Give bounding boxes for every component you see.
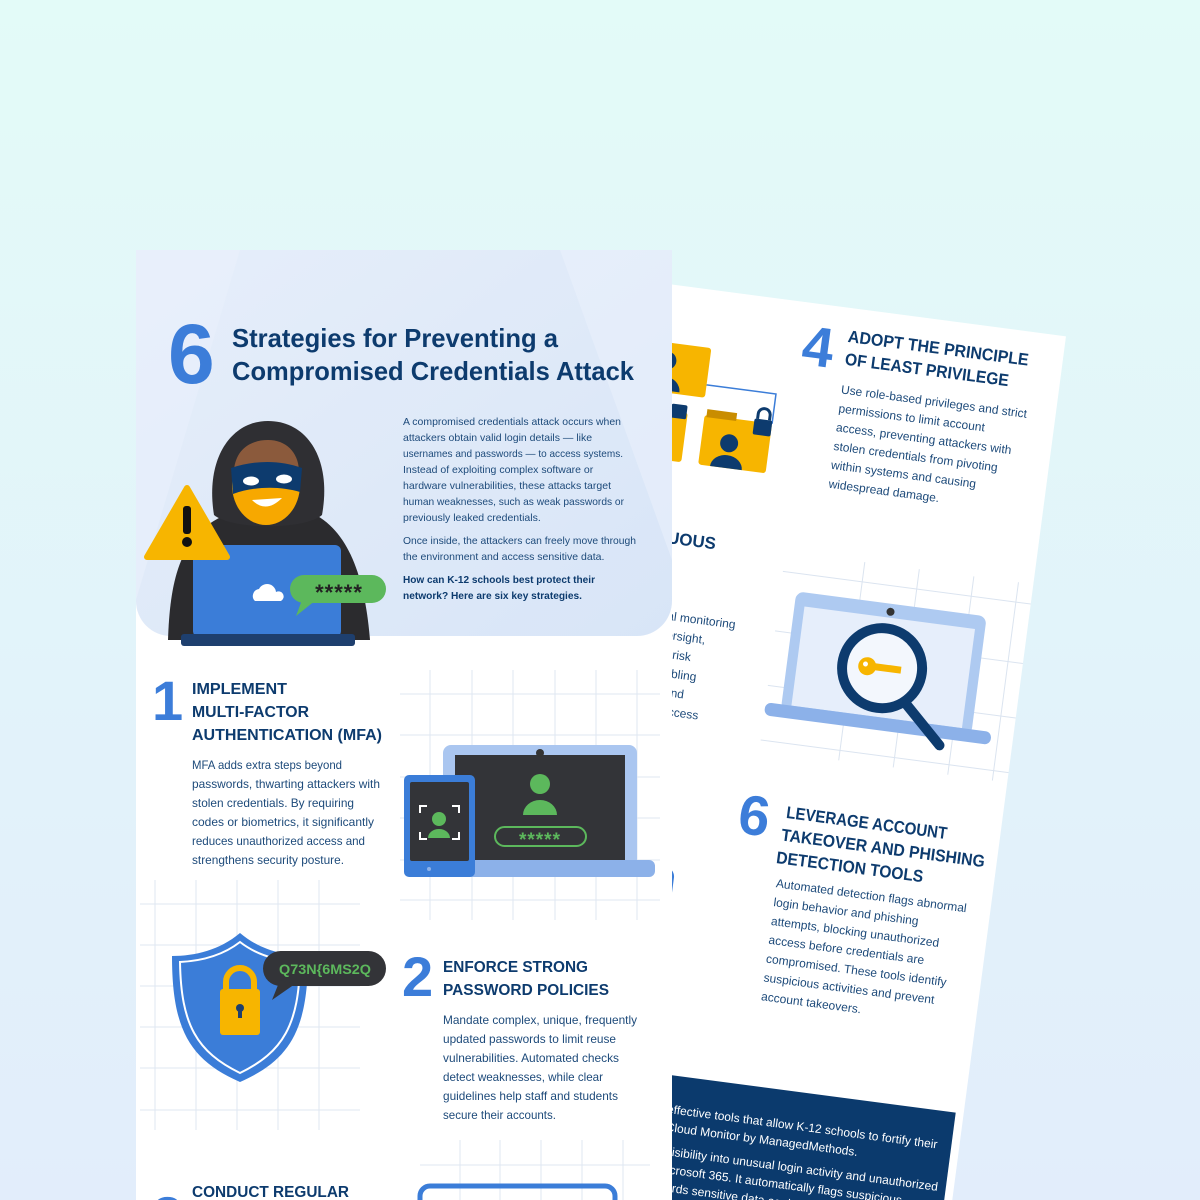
- illustration: shield with padlock and password bubble: [172, 933, 386, 1082]
- intro text: hardware vulnerabilities, these attacks target: [403, 480, 611, 492]
- section 1 body: codes or biometrics, it significantly: [192, 815, 374, 829]
- intro text: Instead of exploiting complex software or: [403, 464, 594, 476]
- illustration: hacker at laptop: [147, 421, 386, 646]
- section 6 body: suspicious activities and prevent: [763, 970, 936, 1007]
- section 6 heading: [740, 796, 984, 882]
- left page: [136, 250, 672, 1200]
- section 4 body: stolen credentials from pivoting: [833, 439, 999, 474]
- section 6 body: login behavior and phishing: [773, 895, 919, 928]
- illustration: blue device (partly hidden): [672, 870, 674, 892]
- intro text: the environment and access sensitive data.: [403, 551, 604, 563]
- section 5 body (partly hidden): faster response, and: [575, 673, 685, 701]
- section 1 heading: 1: [152, 669, 183, 732]
- section 2 body: Mandate complex, unique, frequently: [443, 1013, 637, 1027]
- title: Compromised Credentials Attack: [232, 356, 635, 386]
- section 6 heading: TAKEOVER AND PHISHING: [780, 826, 986, 871]
- header panel: [136, 250, 672, 636]
- intro text: [403, 416, 636, 602]
- section 4 body: widespread damage.: [827, 477, 940, 505]
- section 5 body (partly hidden): provides real-time oversight,: [555, 613, 706, 647]
- section 6 body: account takeovers.: [760, 989, 862, 1016]
- illustration: shield with padlock and password bubble: Q73N{6MS2Q: [279, 961, 371, 977]
- illustration: folders with locks: [672, 343, 777, 473]
- intro text: A compromised credentials attack occurs when: [403, 416, 621, 428]
- section 2 body: [443, 1013, 637, 1122]
- section 2 body: updated passwords to limit reuse: [443, 1032, 616, 1046]
- grid decorations: [140, 670, 660, 1200]
- title: 6: [168, 307, 215, 401]
- section 2 heading: ENFORCE STRONG: [443, 959, 588, 976]
- section 4 heading: [802, 328, 1028, 386]
- illustration: laptop with magnifier and key: [763, 589, 1007, 752]
- section 6 body: [762, 879, 966, 1014]
- section 5 body (partly hidden): to data sooner.: [589, 714, 670, 738]
- section 1 body: strengthens security posture.: [192, 853, 344, 867]
- section 4 body: permissions to limit account: [838, 401, 986, 435]
- section 2 heading: 2: [402, 945, 433, 1008]
- section 1 body: reduces unauthorized access and: [192, 834, 365, 848]
- section 5 body (partly hidden): limiting unauthorized access: [548, 689, 699, 723]
- conclusion band: There are cost-effective tools that allow K-12 schools to fortify their: [586, 1091, 938, 1151]
- conclusion band: [672, 1075, 956, 1200]
- section 5 body (partly hidden): Continuous account and behavioral monitoring: [489, 585, 736, 632]
- section 1 body: [192, 758, 380, 867]
- section 2 heading: PASSWORD POLICIES: [443, 982, 609, 999]
- section 6 body: compromised. These tools identify: [765, 952, 947, 989]
- section 5 body (partly hidden): [672, 612, 735, 720]
- section 5 heading (partly hidden): CONTINUOUS: [601, 520, 717, 553]
- section 1 heading: MULTI-FACTOR: [192, 704, 309, 721]
- section 5 body (partly hidden): identifying at-risk: [601, 638, 693, 664]
- illustration: MFA laptop and tablet: *****: [519, 830, 561, 851]
- section 2 body: secure their accounts.: [443, 1108, 556, 1122]
- section 6 heading: DETECTION TOOLS: [775, 848, 924, 886]
- illustration: hacker at laptop: *****: [315, 580, 363, 605]
- conclusion band: defenses, such as Cloud Monitor by ManagedMethods.: [566, 1107, 859, 1159]
- intro text: How can K-12 schools best protect their: [403, 574, 595, 586]
- section 5 body (partly hidden): accounts, enabling: [596, 657, 697, 684]
- section 6 heading: 6: [735, 782, 774, 849]
- section 4 body: [829, 385, 1028, 503]
- title: Strategies for Preventing a: [232, 323, 559, 353]
- section 6 body: Automated detection flags abnormal: [775, 876, 968, 915]
- illustration: section 3 device outline (cut off): [420, 1186, 615, 1200]
- intro text: human weaknesses, such as weak passwords or: [403, 496, 624, 508]
- section 2 heading: [404, 957, 608, 996]
- section 4 heading: OF LEAST PRIVILEGE: [844, 350, 1010, 390]
- intro text: previously leaked credentials.: [403, 512, 541, 524]
- intro text: Once inside, the attackers can freely move through: [403, 535, 636, 547]
- section 6 heading: LEVERAGE ACCOUNT: [785, 803, 949, 843]
- section 2 body: detect weaknesses, while clear: [443, 1070, 603, 1084]
- section 4 heading: 4: [799, 313, 838, 380]
- section 6 body: access before credentials are: [768, 933, 925, 967]
- section 6 body: attempts, blocking unauthorized: [770, 914, 940, 950]
- intro text: network? Here are six key strategies.: [403, 590, 582, 602]
- section 1 heading: AUTHENTICATION (MFA): [192, 727, 382, 744]
- title: [171, 324, 634, 386]
- intro text: attackers obtain valid login details — like: [403, 432, 592, 444]
- illustration: MFA laptop and tablet: [404, 745, 655, 877]
- section 4 body: within systems and causing: [829, 458, 977, 491]
- section 1 body: passwords, thwarting attackers with: [192, 777, 380, 791]
- section 2 body: guidelines help staff and students: [443, 1089, 618, 1103]
- section 1 heading: [156, 682, 382, 744]
- section 4 heading: ADOPT THE PRINCIPLE: [847, 327, 1030, 370]
- section 4 body: access, preventing attackers with: [835, 420, 1012, 457]
- section 1 heading: IMPLEMENT: [192, 681, 287, 698]
- section 1 body: stolen credentials. By requiring: [192, 796, 354, 810]
- right page: rotated second sheet: [672, 284, 1066, 1200]
- section 2 body: vulnerabilities. Automated checks: [443, 1051, 619, 1065]
- section 4 body: Use role-based privileges and strict: [840, 383, 1029, 421]
- conclusion band: It provides real-time visibility into unusual login activity and unauthorized: [557, 1130, 939, 1194]
- section 1 body: MFA adds extra steps beyond: [192, 758, 342, 772]
- intro text: usernames and passwords — to access systems.: [403, 448, 623, 460]
